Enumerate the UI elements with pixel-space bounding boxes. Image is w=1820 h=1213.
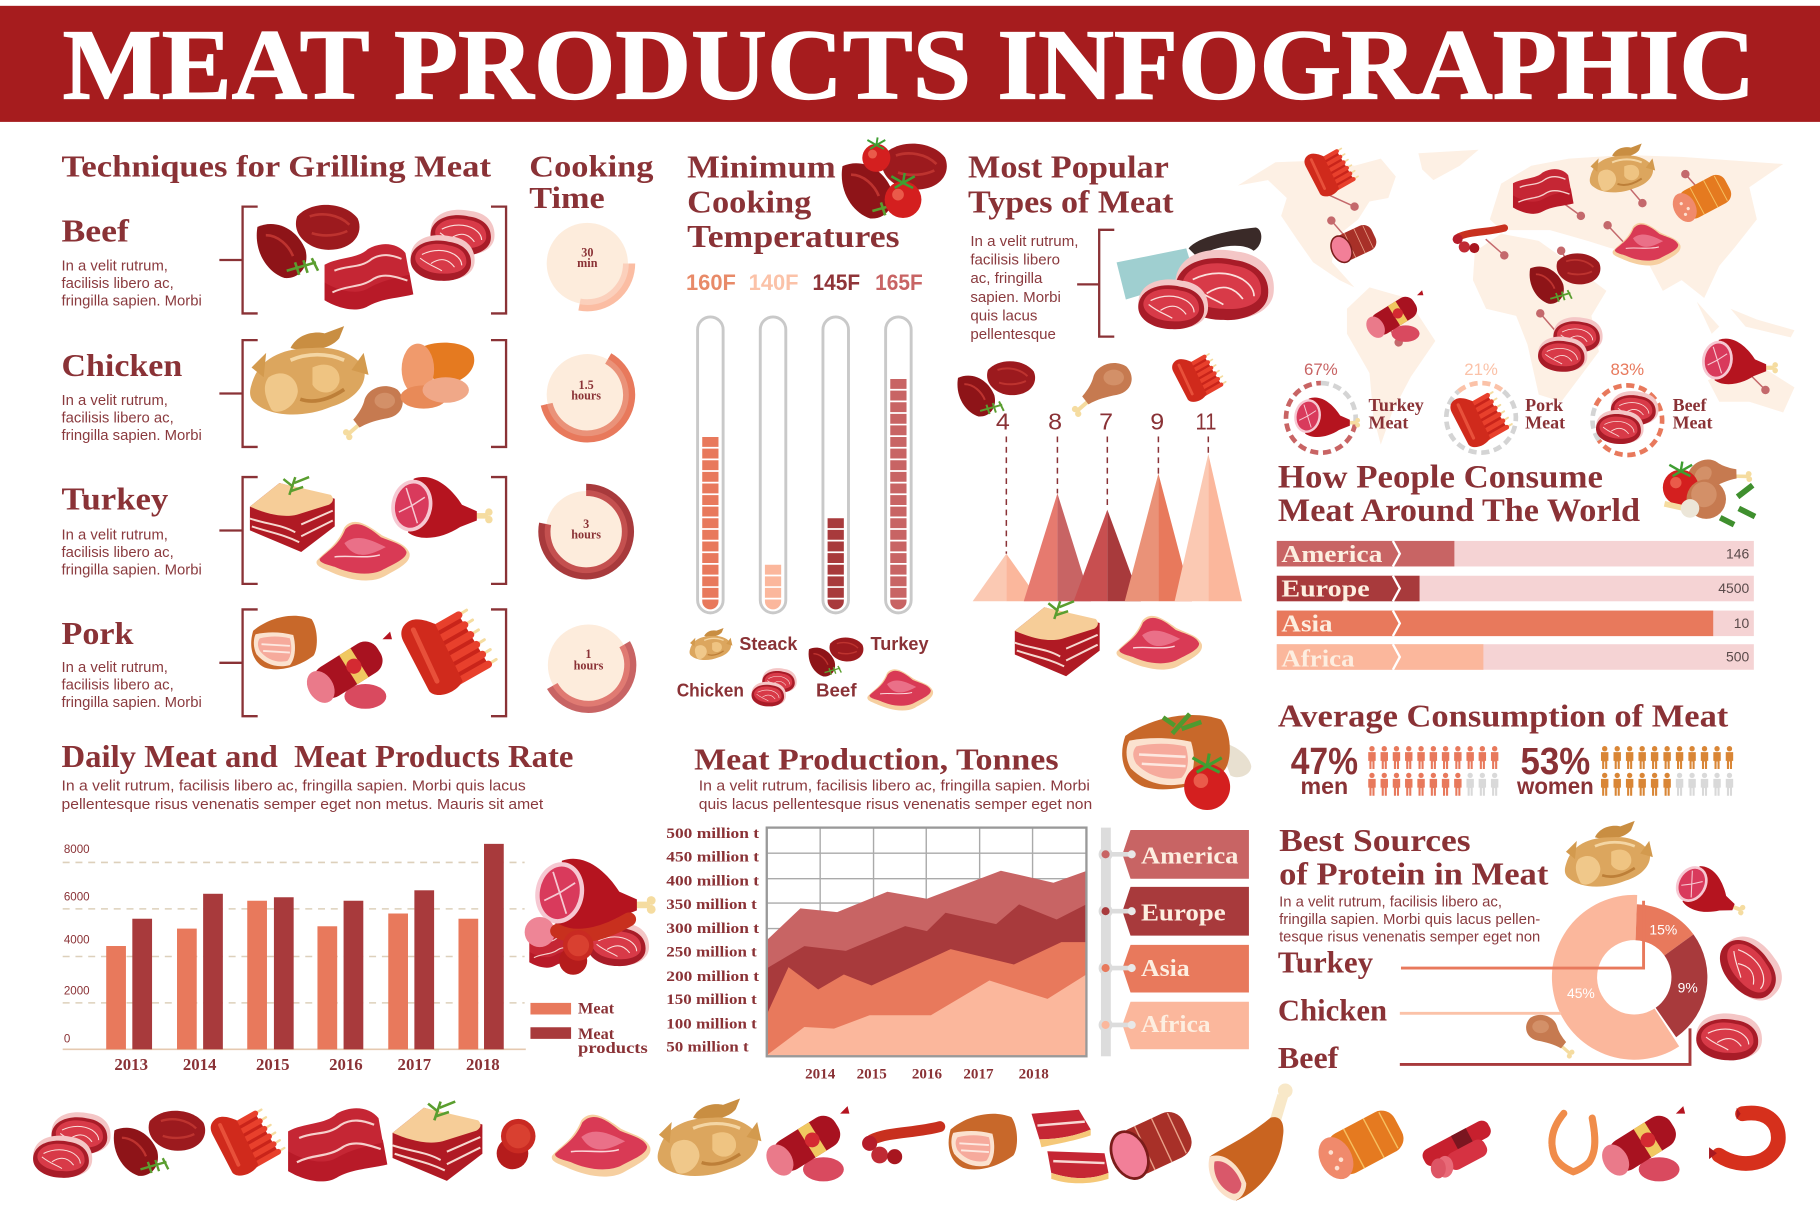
heading: temperatures: Temperatures <box>687 219 900 254</box>
text block: facilisis libero <box>970 252 1060 269</box>
temperature labels: 160F <box>686 270 736 295</box>
heading: production: Meat Production, Tonnes <box>694 743 1059 777</box>
stat: women 53%: 53% <box>1521 740 1590 783</box>
heading: temperatures: Cooking <box>687 184 812 219</box>
icon: beef and tomatoes <box>842 137 947 219</box>
heading: techniques: Techniques for Grilling Meat <box>62 149 492 183</box>
area chart: 50 million t <box>666 1040 749 1056</box>
heading: most popular: Most Popular <box>968 150 1169 185</box>
area chart: 300 million t <box>666 921 759 937</box>
thermometer tube 160F <box>698 317 723 613</box>
legend <box>530 999 648 1057</box>
text block: ac, fringilla <box>970 270 1043 287</box>
area chart: 450 million t <box>666 849 759 865</box>
triangle chart: 7 <box>1099 408 1113 434</box>
bar: America: 146 <box>1726 545 1749 561</box>
row: beef: facilisis libero ac, <box>62 276 174 292</box>
temperature legend <box>677 628 933 711</box>
icon: ribs <box>1172 354 1226 402</box>
area chart: 2018 <box>1019 1066 1049 1082</box>
stat: men 47%: 47% <box>1291 740 1358 783</box>
row: pork: facilisis libero ac, <box>62 677 174 693</box>
callout: turkey: Turkey <box>1278 946 1373 980</box>
map pins <box>1328 171 1769 394</box>
stat: women 53%: women <box>1516 773 1594 799</box>
area chart: 2014 <box>805 1066 836 1082</box>
temperature legend: Steack <box>739 633 798 654</box>
bar: Europe: Europe <box>1281 576 1370 603</box>
ring: 3 hours: 3 <box>583 517 589 531</box>
icon: cutlet <box>1117 616 1202 670</box>
bar: Africa: Africa <box>1281 645 1355 672</box>
temperature labels <box>686 270 923 295</box>
bar: Europe: 4500 <box>1718 580 1749 596</box>
legend: products <box>578 1039 648 1057</box>
ring: 1.5 hours <box>526 334 648 456</box>
gauge: pork meat 21%: Meat <box>1525 412 1565 432</box>
row: chicken: facilisis libero ac, <box>62 411 174 427</box>
heading: temperatures: Minimum <box>687 150 836 185</box>
ring: 30 min: 30 <box>581 246 593 260</box>
map icons <box>1304 144 1778 384</box>
stat: women 53% <box>1516 740 1594 799</box>
triangle chart: 9 <box>1150 408 1164 434</box>
bar chart: 2018 <box>466 1055 500 1074</box>
text block: sapien. Morbi <box>970 289 1061 306</box>
heading: cooking time: Cooking <box>529 149 654 183</box>
pictogram: men <box>1368 746 1498 796</box>
panel: most popular types of meat <box>957 150 1274 676</box>
thermometer tube 165F <box>886 317 911 613</box>
row: beef: In a velit rutrum, <box>62 258 168 274</box>
panel: average consumption of meat <box>1278 699 1733 799</box>
stat: men 47% <box>1291 740 1358 799</box>
ring: 1 hours <box>527 604 650 726</box>
icon: drumsticks with tomato <box>1663 440 1756 525</box>
thermometer tube 140F <box>760 317 786 613</box>
area chart: 250 million t <box>666 944 757 960</box>
heading: daily meat: Daily Meat and Meat Products Rate <box>62 739 573 774</box>
callout: beef: Beef <box>1278 1041 1339 1075</box>
bar: Asia <box>1277 610 1754 637</box>
bar chart: 6000 <box>64 891 90 904</box>
panel: daily meat rate <box>62 739 656 1074</box>
bar chart: 2015 <box>256 1055 290 1074</box>
donut chart <box>1552 895 1707 1060</box>
bar: Asia: 10 <box>1734 615 1749 631</box>
row: turkey: facilisis libero ac, <box>62 545 174 561</box>
ring: 1 hours: hours <box>574 659 604 673</box>
ring: 30 min: min <box>577 256 598 270</box>
gauge: beef meat 83%: Meat <box>1673 412 1713 432</box>
icon: drumstick <box>1526 1015 1574 1059</box>
legend: Meat <box>578 1025 615 1043</box>
bar chart: 2017 <box>398 1055 431 1074</box>
bar: America: America <box>1281 541 1382 568</box>
icon: cleaver and steaks <box>1117 228 1274 329</box>
row: chicken: In a velit rutrum, <box>62 393 168 409</box>
icon: meat pile <box>525 858 656 975</box>
area chart: 500 million t <box>666 826 759 842</box>
bottom row of meat icons <box>33 1083 1778 1200</box>
panel: techniques for grilling meat <box>62 149 506 716</box>
tag: America <box>1099 830 1249 879</box>
row: beef <box>62 205 506 313</box>
temperature labels: 165F <box>875 270 923 295</box>
gauge: pork meat 21%: Pork <box>1525 395 1563 415</box>
heading: cooking time: Time <box>529 181 605 215</box>
callout: chicken: Chicken <box>1278 993 1387 1027</box>
row: pork: Pork <box>62 616 134 651</box>
panel: minimum cooking temperatures <box>677 137 947 711</box>
bar chart: 2014 <box>183 1055 217 1074</box>
icon: pork with tomato and garlic <box>1122 714 1251 810</box>
row: turkey: In a velit rutrum, <box>62 528 168 544</box>
row: turkey: fringilla sapien. Morbi <box>62 563 202 579</box>
heading: how people consume: How People Consume <box>1278 460 1603 496</box>
bar chart: 8000 <box>64 843 90 856</box>
tag: Africa <box>1099 1002 1249 1049</box>
bar chart: 2016 <box>329 1055 363 1074</box>
heading: most popular: Types of Meat <box>968 184 1174 219</box>
gauge: turkey meat 67%: Turkey <box>1368 395 1424 415</box>
text block: pellentesque risus venenatis semper eget non metus. Mauris sit amet <box>62 796 544 813</box>
temperature legend: Chicken <box>677 679 744 700</box>
pictogram: women <box>1601 746 1733 796</box>
donut chart: 9% <box>1678 979 1698 995</box>
tag: Africa: Africa <box>1141 1011 1211 1038</box>
stat: men 47%: men <box>1301 773 1348 799</box>
gauge: pork meat 21% <box>1446 360 1565 453</box>
thermometer tube 145F <box>823 317 848 613</box>
bar: America <box>1277 541 1754 568</box>
row: turkey: Turkey <box>62 482 168 517</box>
gauge: beef meat 83%: 83% <box>1610 360 1644 379</box>
donut chart: 15% <box>1649 921 1677 937</box>
gauge: turkey meat 67% <box>1286 360 1424 453</box>
tag: America: America <box>1141 843 1238 870</box>
icon: chicken <box>1565 821 1653 887</box>
text block: In a velit rutrum, facilisis libero ac, fringilla sapien. Morbi <box>699 777 1090 794</box>
area chart: 2016 <box>912 1066 942 1082</box>
panel: meat production <box>666 714 1251 1082</box>
icon: ham <box>1667 858 1754 926</box>
icon: steak <box>1709 926 1794 1011</box>
title banner: MEAT PRODUCTS INFOGRAPHIC <box>63 9 1755 121</box>
bar: Europe <box>1277 576 1754 603</box>
triangle chart: 8 <box>1048 408 1062 434</box>
triangle chart: 4 <box>996 408 1010 434</box>
panel: how people consume meat <box>1277 440 1756 672</box>
area chart: 200 million t <box>666 969 759 985</box>
gauge: turkey meat 67%: 67% <box>1304 360 1338 379</box>
row: beef: Beef <box>62 213 129 248</box>
panel: best sources of protein <box>1278 821 1794 1075</box>
legend pole <box>1101 828 1111 1056</box>
heading: best sources: Best Sources <box>1279 823 1471 858</box>
ring: 30 min <box>543 219 632 308</box>
area chart: 2017 <box>963 1066 994 1082</box>
area chart: 150 million t <box>666 992 757 1008</box>
world map <box>1238 150 1794 445</box>
callout: beef <box>1278 1028 1690 1075</box>
text block: pellentesque <box>970 326 1056 343</box>
ring: 3 hours <box>541 487 631 576</box>
row: pork <box>62 609 506 716</box>
bracket <box>1077 230 1114 337</box>
callout: turkey <box>1278 901 1644 980</box>
heading: average consumption: Average Consumption of Meat <box>1278 699 1729 734</box>
temperature legend: Beef <box>816 679 857 700</box>
triangle chart: 11 <box>1196 408 1216 434</box>
gauge: turkey meat 67%: Meat <box>1368 412 1408 432</box>
row: chicken: Chicken <box>62 348 182 383</box>
text block: In a velit rutrum, facilisis libero ac, <box>1279 895 1502 911</box>
text block: fringilla sapien. Morbi quis lacus pellen- <box>1279 912 1540 928</box>
bar chart: 2000 <box>64 985 90 998</box>
row: turkey <box>62 476 506 584</box>
ring: 1.5 hours: hours <box>571 388 601 402</box>
row: chicken <box>62 326 506 447</box>
icon: beef <box>957 361 1035 417</box>
bar chart <box>63 843 526 1074</box>
temperature legend: Turkey <box>871 633 929 654</box>
area chart <box>666 826 1086 1082</box>
icon: drumstick <box>1072 363 1132 417</box>
gauge: beef meat 83% <box>1592 360 1713 455</box>
area chart: 2015 <box>857 1066 887 1082</box>
text block: In a velit rutrum, <box>970 233 1078 250</box>
triangle chart <box>973 408 1242 601</box>
area chart: 350 million t <box>666 897 757 913</box>
tag: Asia: Asia <box>1141 955 1190 982</box>
icon: steak <box>1696 1013 1762 1060</box>
text block: tesque risus venenatis semper eget non <box>1279 929 1540 945</box>
panel: cooking time <box>526 149 654 726</box>
bar chart: 2013 <box>114 1055 148 1074</box>
row: pork: In a velit rutrum, <box>62 660 168 676</box>
tag: Europe: Europe <box>1141 899 1226 926</box>
bar: Africa: 500 <box>1726 649 1749 665</box>
legend: Meat <box>578 999 615 1017</box>
heading: how people consume: Meat Around The World <box>1278 493 1640 529</box>
bar chart: 0 <box>64 1032 70 1045</box>
row: beef: fringilla sapien. Morbi <box>62 293 202 309</box>
row: chicken: fringilla sapien. Morbi <box>62 428 202 444</box>
row: pork: fringilla sapien. Morbi <box>62 695 202 711</box>
donut chart: 45% <box>1567 985 1595 1001</box>
bar: Africa <box>1277 644 1754 672</box>
area chart: 400 million t <box>666 874 759 890</box>
bar: Asia: Asia <box>1281 610 1332 637</box>
heading: best sources: of Protein in Meat <box>1279 856 1549 891</box>
bar chart: 4000 <box>64 934 90 947</box>
ring: 3 hours: hours <box>571 528 601 542</box>
tag: Asia <box>1099 945 1249 992</box>
text block: In a velit rutrum, facilisis libero ac, fringilla sapien. Morbi quis lacus <box>62 777 526 794</box>
area chart: 100 million t <box>666 1016 757 1032</box>
gauge: pork meat 21%: 21% <box>1464 360 1498 379</box>
text block: quis lacus <box>970 307 1037 324</box>
ring: 1 hours: 1 <box>585 647 592 661</box>
temperature labels: 145F <box>813 270 860 295</box>
gauge: beef meat 83%: Beef <box>1673 395 1708 415</box>
temperature labels: 140F <box>749 270 799 295</box>
icon: bacon block <box>1015 601 1100 676</box>
tag: Europe <box>1099 887 1249 936</box>
ring: 1.5 hours: 1.5 <box>579 378 594 392</box>
text block: quis lacus pellentesque risus venenatis semper eget non <box>699 796 1092 813</box>
